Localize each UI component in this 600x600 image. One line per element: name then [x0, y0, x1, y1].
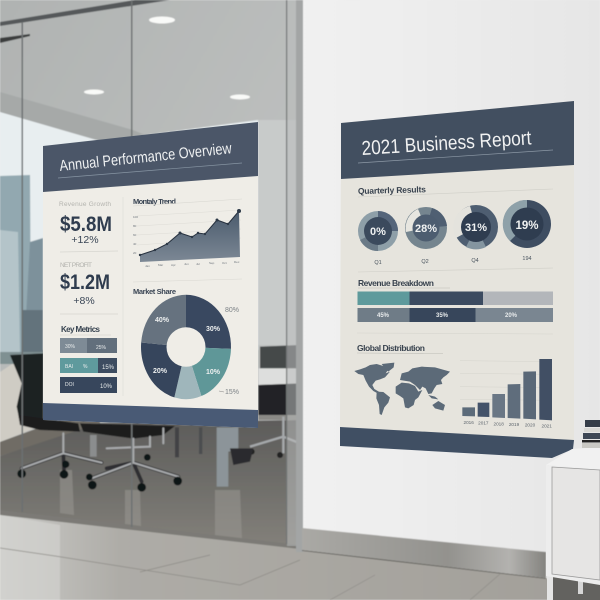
bar chart by year: 2016: [463, 420, 474, 425]
line chart: monthly trend: 60: [133, 233, 137, 237]
skirting board: [302, 528, 546, 578]
poster title: Annual Performance Overview: [59, 140, 233, 175]
key metrics table: [60, 325, 117, 393]
outer floor: [0, 512, 600, 600]
pie chart: market share: [133, 287, 239, 399]
white wall: [303, 0, 600, 590]
key metrics table: DOI: [65, 382, 74, 388]
poster background: [340, 101, 574, 441]
line chart: monthly trend: 80: [133, 224, 137, 228]
line chart: monthly trend: Mar: [158, 263, 163, 267]
key metrics table: 10%: [100, 384, 113, 390]
poster header band: [43, 122, 258, 192]
global distribution heading: Global Distribution: [357, 343, 425, 353]
pie chart: market share: 30%: [206, 326, 221, 333]
quarterly results donuts: [358, 184, 553, 266]
revenue breakdown bars: [358, 278, 553, 322]
revenue breakdown bars: 20%: [505, 313, 518, 319]
donut 194: [503, 200, 551, 262]
poster title: 2021 Business Report: [361, 127, 532, 160]
key metrics table: %: [83, 364, 88, 370]
conference table and far chair: [175, 345, 302, 487]
line chart: monthly trend: Apr: [171, 263, 176, 267]
glass mullions: [22, 0, 303, 552]
bar chart by year: 2017: [478, 421, 489, 426]
line chart: monthly trend: Jun: [184, 262, 189, 266]
stack of books: [582, 420, 600, 448]
key metrics table: BAI: [65, 364, 73, 370]
key metrics table: 15%: [102, 365, 115, 371]
donut Q2: Q2: [421, 259, 429, 265]
floor reflections: [60, 470, 242, 540]
poster background: [43, 122, 258, 428]
line chart: monthly trend: Dec: [234, 260, 240, 264]
line chart: monthly trend: Sep: [209, 261, 215, 265]
key metrics table: 30%: [65, 344, 76, 350]
bar chart by year: [460, 359, 552, 428]
stat: revenue growth: Revenue Growth: [59, 201, 111, 208]
line chart: monthly trend: Jul: [196, 262, 200, 266]
revenue breakdown bars: 45%: [377, 313, 390, 319]
stat: revenue growth: [59, 201, 112, 246]
donut 194: 194: [522, 256, 532, 262]
stat: revenue growth: +12%: [71, 234, 99, 246]
ceiling lights: [84, 16, 250, 100]
donut Q1: [358, 211, 398, 266]
city skyline through window: [0, 175, 43, 364]
stat: net profit: NET PROFIT: [60, 262, 92, 269]
pie chart: market share: 10%: [206, 369, 221, 376]
line chart: monthly trend: [133, 197, 242, 268]
line chart: monthly trend: 40: [133, 242, 137, 246]
office chairs: [10, 353, 182, 492]
bar chart by year: 2020: [525, 423, 536, 428]
donut Q4: Q4: [471, 258, 479, 264]
pie chart: market share: 40%: [155, 317, 170, 324]
donut Q4: 31%: [465, 222, 487, 234]
poster footer band: [43, 403, 258, 428]
line chart: monthly trend: 100: [133, 215, 138, 219]
line chart: monthly trend: Montaly Trend: [133, 197, 176, 206]
bar chart by year: 2019: [509, 422, 520, 427]
revenue breakdown bars: 35%: [436, 313, 449, 319]
pie chart: market share: Market Share: [133, 287, 176, 296]
line chart: monthly trend: Oct: [222, 261, 227, 265]
donut Q1: 0%: [370, 226, 386, 238]
world map: [354, 363, 450, 415]
pie chart: market share: 15%: [225, 389, 239, 396]
pie chart: market share: 20%: [153, 368, 168, 375]
key metrics table: 25%: [96, 345, 107, 351]
stat: net profit: [60, 262, 110, 307]
donut 194: 19%: [515, 220, 539, 232]
stat: net profit: +8%: [73, 295, 95, 307]
stat: revenue growth: $5.8M: [60, 213, 112, 236]
left poster: Annual Performance Overview: [43, 122, 258, 428]
white cabinet with books: [546, 420, 600, 600]
poster header band: [341, 101, 574, 179]
donut Q4: [453, 205, 498, 264]
line chart: monthly trend: Jan: [145, 264, 150, 268]
bar chart by year: 2021: [541, 423, 552, 428]
donut Q2: 28%: [415, 223, 437, 235]
donut Q1: Q1: [374, 260, 382, 266]
line chart: monthly trend: 20: [133, 251, 137, 255]
poster footer band: [340, 427, 574, 458]
bar chart by year: 2018: [493, 421, 504, 426]
key metrics table: Key Metrics: [61, 325, 101, 334]
revenue breakdown bars: Revenue Breakdown: [358, 278, 434, 288]
quarterly results donuts: Quarterly Results: [358, 184, 426, 196]
pie chart: market share: 80%: [225, 307, 239, 314]
right poster: 2021 Business Report: [340, 101, 574, 458]
stat: net profit: $1.2M: [60, 271, 110, 294]
donut Q2: [405, 207, 447, 265]
